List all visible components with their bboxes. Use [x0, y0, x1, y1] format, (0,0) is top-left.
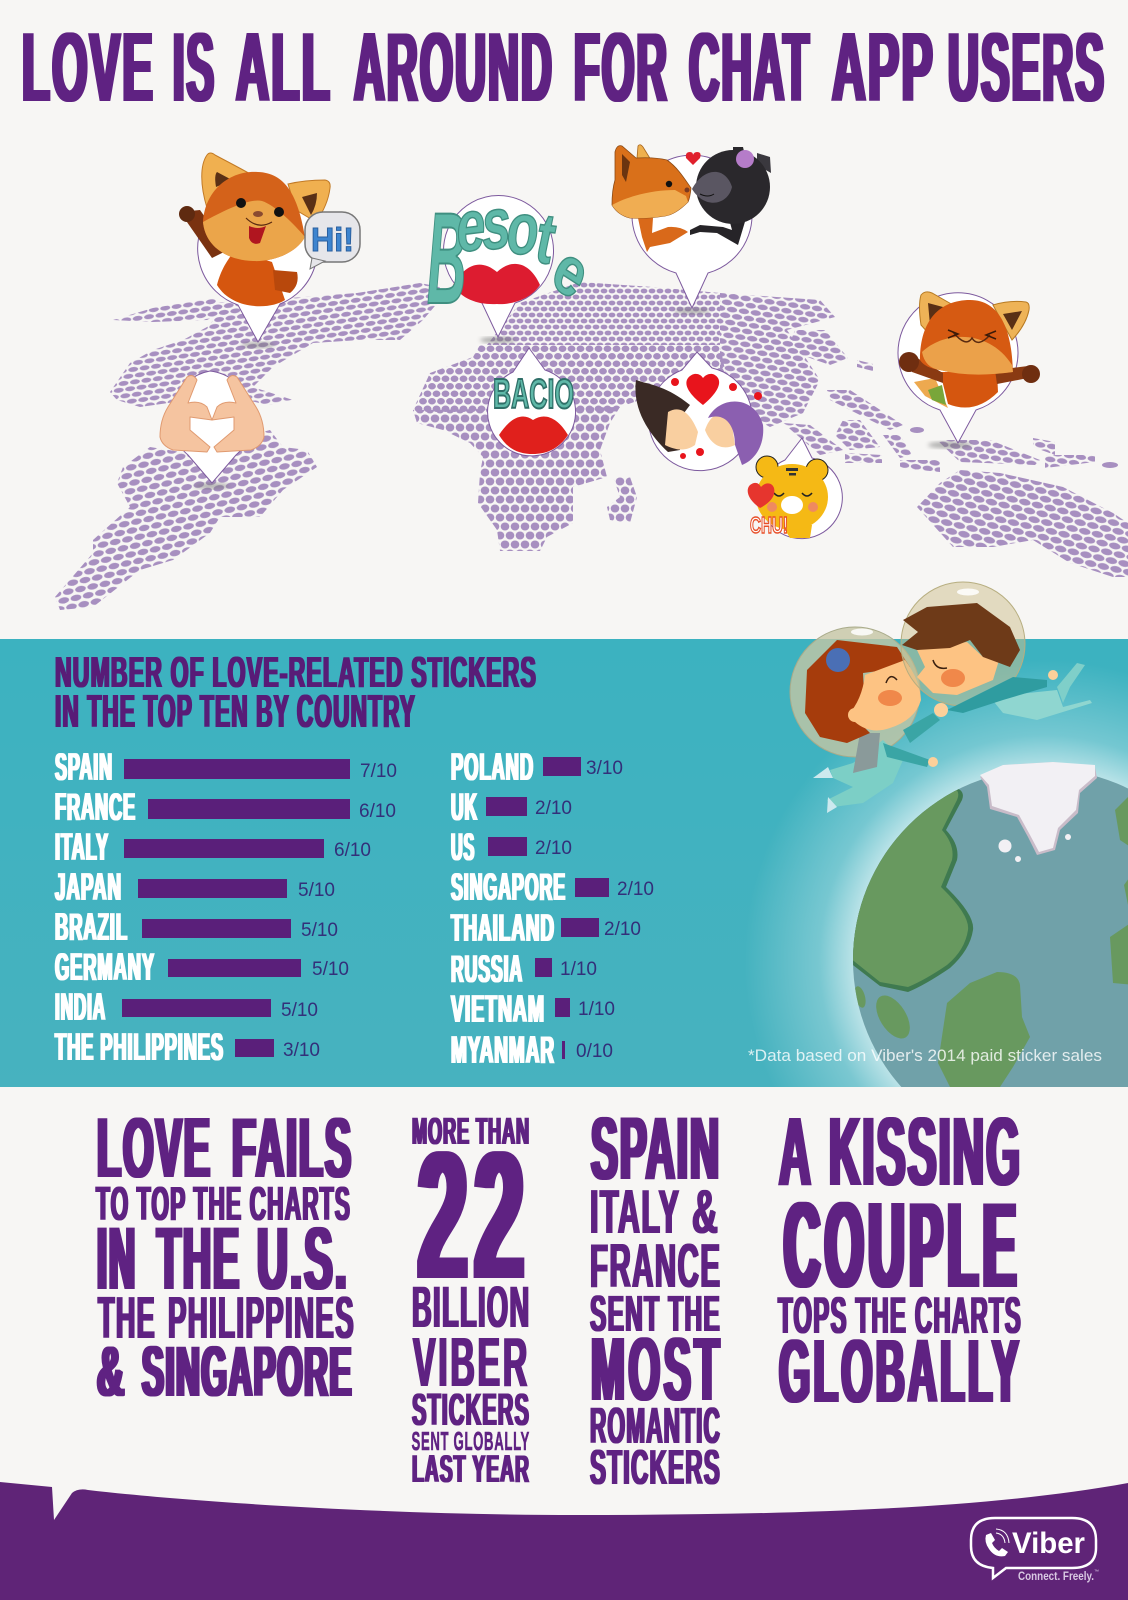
bar chart: right column: 2/10 — [617, 879, 654, 900]
bar chart: right column: 2/10 — [535, 798, 572, 819]
bar chart: left column: 3/10 — [283, 1040, 320, 1061]
text: STICKERS — [590, 1440, 721, 1495]
bar chart: right column: SINGAPORE — [451, 866, 566, 909]
bar chart: left column: 6/10 — [359, 801, 396, 822]
title: LOVE — [22, 12, 155, 122]
bar chart: right column: VIETNAM — [451, 988, 545, 1031]
bar chart: left column — [55, 746, 397, 1069]
illustration: kissing astronauts — [790, 582, 1092, 813]
title: ALL — [236, 12, 332, 122]
bar chart: right column: 0/10 — [576, 1041, 613, 1062]
Viber logo: Viber — [1012, 1527, 1085, 1560]
bar chart: right column: 1/10 — [560, 959, 597, 980]
text: TO TOP THE CHARTS — [96, 1178, 351, 1231]
Viber logo — [971, 1518, 1099, 1583]
title — [22, 12, 1106, 122]
title: IS — [173, 12, 216, 122]
sticker pin: heart hands — [160, 371, 264, 489]
text: SPAIN — [591, 1099, 721, 1198]
sticker pin: Bacio lips — [488, 348, 576, 456]
bar chart: left column: BRAZIL — [55, 906, 128, 949]
fact: spain italy france: ITALY — [590, 1177, 680, 1247]
text: FAILS — [232, 1100, 353, 1196]
sticker pin: Besote lips: B — [427, 187, 466, 332]
bar chart: left column: 5/10 — [298, 880, 335, 901]
bar chart: right column: 1/10 — [578, 999, 615, 1020]
text: SENT THE — [590, 1285, 721, 1342]
title: FOR — [574, 12, 669, 122]
text: MORE THAN — [412, 1111, 530, 1153]
bar chart: right column: RUSSIA — [451, 948, 523, 991]
sticker pin: hugging fox — [898, 292, 1040, 448]
bar chart: left column: FRANCE — [55, 786, 136, 829]
bar chart: left column: JAPAN — [55, 866, 122, 909]
sticker pin: fox and black cat kissing — [612, 145, 771, 314]
sticker pin: waving fox saying Hi — [179, 153, 360, 348]
chart heading — [55, 649, 537, 737]
sticker pin: tiger CHU: CHU! — [750, 512, 788, 538]
bar chart: right column: 3/10 — [586, 758, 623, 779]
fact: love fails to top the charts: THE — [98, 1284, 156, 1351]
dotted world map — [55, 282, 1128, 610]
bar chart: right column — [451, 746, 654, 1072]
fact: love fails to top the charts: U.S. — [257, 1209, 349, 1308]
text: SINGAPORE — [142, 1333, 353, 1412]
chart heading: IN THE TOP TEN BY COUNTRY — [55, 685, 416, 737]
teal panel background — [0, 639, 1128, 1087]
bar chart: left column: 7/10 — [360, 761, 397, 782]
bar chart: left column: ITALY — [55, 826, 109, 869]
fact: a kissing couple: A — [779, 1097, 813, 1206]
bar chart: right column: US — [451, 826, 475, 869]
sticker pin: waving fox saying Hi: Hi! — [311, 221, 354, 258]
bar chart: left column: INDIA — [55, 986, 106, 1029]
bar chart: right column: MYANMAR — [451, 1029, 555, 1072]
fact: love fails to top the charts: LOVE — [97, 1100, 212, 1196]
bar chart: left column: SPAIN — [55, 746, 113, 789]
bar chart: right column: THAILAND — [451, 907, 555, 950]
fact: 22 billion viber stickers: SENT GLOBALLY — [412, 1426, 530, 1456]
glow around earth — [756, 672, 1128, 1087]
title: CHAT — [689, 12, 811, 122]
bar chart: left column: 5/10 — [281, 1000, 318, 1021]
bar chart: right column: 2/10 — [535, 838, 572, 859]
bar chart: right column: UK — [451, 786, 478, 829]
footer speech bubble band — [0, 1482, 1128, 1600]
text: 22 — [418, 1114, 531, 1317]
panel: stickers by country — [0, 639, 1128, 1087]
footnote: *Data based on Viber's 2014 paid sticker sales — [748, 1047, 1102, 1065]
text: ROMANTIC — [590, 1397, 721, 1454]
text: PHILIPPINES — [168, 1284, 355, 1351]
bar chart: right column: 2/10 — [604, 919, 641, 940]
fact: a kissing couple — [778, 1097, 1022, 1422]
text: LAST YEAR — [412, 1448, 530, 1491]
bar chart: left column: 5/10 — [301, 920, 338, 941]
fact: love fails to top the charts — [96, 1100, 355, 1412]
text: STICKERS — [412, 1384, 530, 1435]
bar chart: left column: THE PHILIPPINES — [55, 1026, 224, 1069]
illustration: earth — [853, 762, 1128, 1087]
sticker pin: tiger CHU — [748, 438, 842, 539]
fact: 22 billion viber stickers — [412, 1111, 531, 1491]
bar chart: left column: GERMANY — [55, 946, 155, 989]
sticker pin: Bacio lips: BACIO — [493, 370, 574, 417]
title: APP — [832, 12, 935, 122]
sticker pin: Besote lips: esote — [454, 182, 596, 316]
Viber logo: Connect. Freely. — [1018, 1569, 1094, 1583]
text: BILLION — [412, 1275, 530, 1340]
bar chart: left column: 5/10 — [312, 959, 349, 980]
Viber logo: ™ — [1094, 1569, 1099, 1575]
fact: spain italy france: & — [692, 1177, 720, 1247]
bar chart: right column: POLAND — [451, 746, 534, 789]
text: MOST — [591, 1319, 723, 1420]
title: AROUND — [354, 12, 554, 122]
fact: love fails to top the charts: & — [97, 1333, 126, 1412]
text: FRANCE — [590, 1231, 722, 1301]
chart heading: NUMBER OF LOVE-RELATED STICKERS — [55, 649, 537, 697]
text: VIBER — [413, 1323, 530, 1401]
fact: spain italy france — [590, 1099, 723, 1495]
fact: love fails to top the charts: IN — [97, 1209, 137, 1308]
sticker pin: kissing couple — [635, 352, 763, 471]
fact: love fails to top the charts: THE — [157, 1209, 241, 1308]
bar chart: left column: 6/10 — [334, 840, 371, 861]
